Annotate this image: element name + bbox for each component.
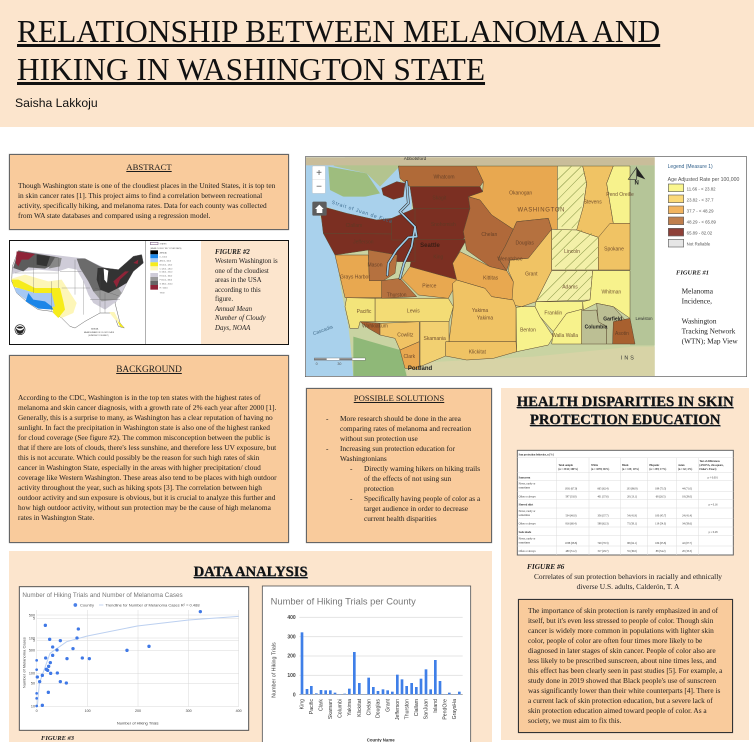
table: sun protection behaviours: 75 (58.1) <box>627 523 637 526</box>
map legend: 23.82 - < 37.7 <box>687 197 714 202</box>
x axis labels: 300 <box>186 709 192 713</box>
map base terrain <box>306 157 655 376</box>
figure 6 description: Correlates of sun protection behaviors in racially and ethnically <box>534 572 722 581</box>
figure 2 caption: Western Washington is <box>215 258 278 265</box>
county labels: Kittitas <box>483 276 499 282</box>
data points <box>35 610 202 707</box>
table: sun protection behaviours: 1038 (68.8) <box>565 542 577 545</box>
county labels: Lewis <box>407 309 420 315</box>
table: sun protection behaviours: p < 0.001 <box>708 476 718 479</box>
table: sun protection behaviours: (n = 135; 10%) <box>622 468 639 471</box>
map legend: 65.89 - 82.02 <box>687 231 713 236</box>
abstract text: activity, specifically hiking, and melanoma rates. Data for each county was collected <box>18 201 267 210</box>
county labels: SanJuan <box>424 699 430 719</box>
icon: north arrow: N <box>634 180 639 186</box>
y axis labels: 300 <box>287 634 296 640</box>
y axis labels: 400 <box>287 615 296 621</box>
county labels: Island <box>433 699 439 713</box>
table: sun protection behaviours: 88 (34.2) <box>656 550 666 553</box>
panel: possible solutions <box>306 388 492 543</box>
solution 1: More research should be done in the area <box>340 414 461 423</box>
x axis labels: 0 <box>36 709 38 713</box>
callout text <box>528 606 722 725</box>
y axis labels: 50 <box>31 682 35 686</box>
background text: According to the CDC, Washington is in the top ten states with the highest rates of <box>18 393 260 402</box>
figure 6 caption: FIGURE #6 <box>527 562 564 571</box>
county labels: Douglas <box>515 240 534 246</box>
county labels: Wenatchee <box>497 257 523 263</box>
table: sun protection behaviours: Often or always <box>519 495 536 498</box>
county labels: Yakima <box>472 308 488 314</box>
figure 2 caption: Number of Cloudy <box>215 315 266 322</box>
geographic labels <box>312 156 653 361</box>
county labels: Pend Oreille <box>606 192 634 198</box>
county labels: Klickitat <box>469 349 487 355</box>
map legend: Legend (Measure 1) <box>668 164 713 170</box>
table: sun protection behaviours <box>516 450 734 556</box>
figure 2 caption: according to this <box>215 287 261 294</box>
table: sun protection behaviours: Black <box>622 464 629 467</box>
county labels <box>340 174 634 360</box>
county labels: Clallam <box>414 699 420 716</box>
panel: background <box>9 355 289 543</box>
geographic labels: Cascadia <box>312 324 334 337</box>
callout text: skin protection education aimed toward people of color. As a <box>528 706 707 715</box>
health heading <box>516 394 734 428</box>
panel: data analysis <box>9 551 492 742</box>
map legend: C 120.0 - 140.0 <box>160 268 172 270</box>
figure 2 caption: figure. <box>215 296 233 303</box>
table: sun protection behaviours: 54 (41.9) <box>627 515 637 518</box>
scatter chart: Number of Hiking Trials and Number of Melanoma Cases <box>22 592 183 599</box>
white map area <box>10 241 201 344</box>
figure 1 caption: Incidence, <box>682 297 712 306</box>
map legend: F 160.0 - 180.0 <box>160 280 172 282</box>
figure 6 description <box>534 572 722 591</box>
callout text: was significantly lower than their white counterparts [4]. There is <box>528 686 720 695</box>
county labels: Grays Harbor <box>340 275 370 281</box>
county labels: Chelan <box>481 232 497 238</box>
x axis labels: Number of Melanoma Cases <box>21 637 26 688</box>
geographic labels: INS <box>621 355 636 361</box>
table: sun protection behaviours: 44 (71.0) <box>682 487 692 490</box>
x axis labels: 200 <box>135 709 141 713</box>
county labels: Jefferson <box>395 699 401 720</box>
county labels: GraysHa <box>452 699 458 719</box>
county labels: Grant <box>385 698 391 712</box>
table: sun protection behaviours: p = 0.16 <box>709 504 718 507</box>
x axis labels: Number of Hiking Trials <box>117 721 158 726</box>
abstract text: from WA state databases and compared using a regression model. <box>18 211 210 220</box>
bold place labels: Garfield <box>603 316 622 322</box>
figure 1 caption: Washington <box>682 317 717 326</box>
puget sound water <box>387 182 417 278</box>
table: sun protection behaviours: sometimes <box>519 541 530 544</box>
background text: cancer in Washington State, especially in the areas with higher precipitation/ cloud <box>18 463 261 472</box>
map caption: MEAN NUMBER OF CLOUDY DAYS <box>84 331 115 334</box>
county labels: Adams <box>562 285 578 291</box>
table: sun protection behaviours: (n = 259; 17%) <box>649 468 666 471</box>
county labels: Skamania <box>424 336 446 342</box>
county labels: Skamani <box>328 699 334 719</box>
county labels: Lincoln <box>564 249 580 255</box>
table: sun protection behaviours: 665 (62.4) <box>597 487 609 490</box>
background text <box>18 393 277 522</box>
background text: sunlight. In fact the precipitation in Washington state is also one of the highest ranked <box>18 423 270 432</box>
solution 2: Increasing sun protection education for <box>340 444 455 453</box>
county labels: Yakima <box>347 699 353 716</box>
county labels: Okanogan <box>509 191 532 197</box>
table: sun protection behaviours: 119 (54.3) <box>655 523 666 526</box>
header panel <box>0 0 754 127</box>
solution 1: - <box>326 414 328 423</box>
county labels: King <box>433 255 444 261</box>
y axis labels: 100 <box>29 636 35 640</box>
figure 3 caption: FIGURE #3 <box>41 735 74 742</box>
table: sun protection behaviours: 18 (29.0) <box>682 495 692 498</box>
table: sun protection behaviours: 356 (37.7) <box>597 515 609 518</box>
county labels <box>300 698 458 720</box>
solution 2b: Specifically having people of color as a <box>364 494 480 503</box>
solution 2 <box>326 444 455 463</box>
table: sun protection behaviours: 98 (64.1) <box>627 542 637 545</box>
trendline <box>37 616 239 707</box>
county labels: Pacific <box>309 699 315 714</box>
county labels: Chelan <box>366 699 372 715</box>
puget sound shoreline <box>387 182 417 278</box>
county labels: Columbi <box>338 699 344 718</box>
map legend: 11.66 - < 23.82 <box>687 186 716 191</box>
hatch marks: unreliable counties <box>537 166 598 301</box>
grid <box>37 610 239 707</box>
county labels: Jefferson <box>353 239 374 245</box>
solution 2b: - <box>350 494 352 503</box>
county labels: King <box>300 699 306 709</box>
callout: skin protection text <box>518 599 733 733</box>
y axis labels: 5 <box>33 617 35 621</box>
table: sun protection behaviours: 24 (41.4) <box>682 515 692 518</box>
figure 2 caption: Annual Mean <box>215 306 252 313</box>
figure 2 caption <box>214 249 278 332</box>
title <box>17 14 660 86</box>
icon: home button <box>312 202 327 216</box>
panel: health disparities <box>501 388 749 740</box>
county labels: Pierce <box>422 284 437 290</box>
county labels: Clark <box>403 354 416 360</box>
map legend: 37.7 - < 48.29 <box>687 208 714 213</box>
county labels: Stevens <box>584 200 602 206</box>
table: sun protection behaviours: 816 (60.4) <box>565 523 577 526</box>
panel: abstract <box>9 154 289 230</box>
callout text: study done in 2019 showed that Black people's use of sunscreen <box>528 676 716 685</box>
county labels: WASHINGTON <box>517 207 565 213</box>
icon: zoom controls: − <box>316 182 322 193</box>
table: sun protection behaviours: Test of differences <box>699 460 720 463</box>
x axis labels <box>21 637 242 726</box>
callout text: cancer is widely more common in populations with lighter skin <box>528 626 714 635</box>
icon: NOAA logo <box>15 325 25 335</box>
figure 2 caption: FIGURE #2 <box>215 249 250 256</box>
county labels: Whitman <box>601 290 621 296</box>
county labels: PendOre <box>442 699 448 720</box>
map legend: ANNUAL <box>160 251 167 254</box>
bar chart: Number of Hiking Trials per County <box>271 597 416 607</box>
abstract text <box>18 181 276 220</box>
callout text: The importance of skin protection is rarely emphasized in and of <box>528 606 718 615</box>
abstract heading: ABSTRACT <box>126 162 172 172</box>
map legend: TITLE <box>160 292 165 294</box>
solution 2a <box>350 464 480 493</box>
icon: zoom controls <box>312 166 325 193</box>
callout text: a current lack of skin protection education, but a severe lack of <box>528 696 713 705</box>
county labels: Douglas <box>376 699 382 718</box>
table: sun protection behaviours: 42 (67.7) <box>682 542 692 545</box>
scatter chart <box>18 586 250 731</box>
county labels: Wahkiakum <box>362 324 388 330</box>
solution 2b: current health disparities <box>364 514 437 523</box>
y axis labels: 0 <box>293 692 296 698</box>
table: sun protection behaviours: 401 (37.6) <box>597 495 609 498</box>
county labels: Pacific <box>357 309 372 315</box>
callout text: less likely to be prescribed sunscreen, about nine times less, and <box>528 656 716 665</box>
map legend: G 180.0 - 200.0 <box>160 284 172 286</box>
table: sun protection behaviours: Never, rarely or <box>519 510 536 513</box>
county labels: Clallam <box>346 223 362 229</box>
solution 1: comparing rates of melanoma and recreation <box>340 424 471 433</box>
map legend: B 100.0 - 120.0 <box>160 264 172 266</box>
solution 2a: of the effects of not using sun <box>364 474 451 483</box>
map legend: STATES <box>160 242 167 245</box>
county polygons <box>320 166 635 369</box>
x axis labels: 400 <box>236 709 242 713</box>
callout text: color, people of color are often four times more likely to be <box>528 636 702 645</box>
table: sun protection behaviours: Seek shade <box>519 531 532 534</box>
health heading: PROTECTION EDUCATION <box>530 412 720 428</box>
scale bar: 30 <box>337 362 341 366</box>
data analysis heading: DATA ANALYSIS <box>193 564 308 580</box>
abstract text: in skin cancer rates [1]. This project aims to find a correlation between recreational <box>18 191 262 200</box>
callout text: itself, but it's even less stressed to people of color. Though skin <box>528 616 713 625</box>
county labels: Yakima <box>477 315 493 321</box>
panel: figure 2 cloudy days map <box>9 240 289 345</box>
callout text: this effect has been clearly seen in past studies [5]. For example, a <box>528 666 722 675</box>
table: sun protection behaviours: 1831 (67.0) <box>565 487 577 490</box>
map legend: Age Adjusted Rate per 100,000 <box>668 177 739 183</box>
y axis labels: 10 <box>31 705 35 709</box>
solution 1: without sun protection use <box>340 434 418 443</box>
author: Saisha Lakkoju <box>15 96 98 110</box>
background heading: BACKGROUND <box>116 365 182 375</box>
table: sun protection behaviours: 597 (33.0) <box>565 495 577 498</box>
y axis labels <box>29 613 35 709</box>
table: sun protection behaviours: Often or always <box>519 523 536 526</box>
county labels: Thurston <box>404 699 410 719</box>
grid <box>299 617 463 675</box>
map caption <box>84 328 115 337</box>
solution 2b <box>350 494 480 523</box>
table: sun protection behaviours: Never, rarely or <box>519 537 536 540</box>
panel: Washington melanoma incidence map <box>305 156 747 377</box>
table: sun protection behaviours: Sun protection behavior, n (%) <box>519 453 554 456</box>
county labels: Cowlitz <box>397 333 414 339</box>
table: sun protection behaviours: Asian <box>678 464 685 467</box>
county labels: Grant <box>525 271 538 277</box>
table: sun protection behaviours: Total sample <box>558 464 574 467</box>
table: sun protection behaviours: p = 0.28 <box>709 531 718 534</box>
table: sun protection behaviours: Sleeved shirt <box>519 504 533 507</box>
title: HIKING IN WASHINGTON STATE <box>17 52 485 86</box>
solutions heading: POSSIBLE SOLUTIONS <box>354 393 444 403</box>
callout text: diagnosed in later stages of skin cancer. People of color also are <box>528 646 716 655</box>
table: sun protection behaviours: 34 (58.6) <box>682 523 692 526</box>
table: sun protection behaviours: 588 (62.3) <box>597 523 609 526</box>
icon: US cloudy days map <box>11 241 182 344</box>
map legend: Not Reliable <box>687 242 711 247</box>
bold place labels: Portland <box>408 366 432 372</box>
map legend <box>668 164 739 247</box>
table: sun protection behaviours: Hispanic <box>649 464 660 467</box>
solution 2a: Directly warning hikers on hiking trails <box>364 464 480 473</box>
background text: for cloud coverage (See figure #2). The common misconception between the public is <box>18 433 270 442</box>
map legend <box>150 242 182 294</box>
map legend: 0 - 100.0 <box>160 256 167 258</box>
background text: outdoor activity and sun exposure is obvious, but it is crucial to analyze this further and <box>18 493 275 502</box>
bar chart <box>262 586 472 742</box>
icon: zoom controls: + <box>316 168 322 179</box>
table: sun protection behaviours: (n = 3334; 100%) <box>558 468 578 471</box>
solution 1 <box>326 414 471 443</box>
map legend: (MEAN CLOUDY SKY COVER DAYS) <box>150 247 182 250</box>
geographic labels: Lewiston <box>635 316 653 321</box>
bold place labels <box>408 243 622 372</box>
table: sun protection behaviours: 100 (45.7) <box>655 515 666 518</box>
legend: Trendline for Number of Melanoma Cases R² = 0.488 <box>105 603 200 608</box>
county labels: Thurston <box>387 293 407 299</box>
solution 2a: protection <box>364 484 394 493</box>
table: sun protection behaviours: 55 (36.0) <box>627 550 637 553</box>
county labels: Asotin <box>615 331 629 337</box>
table: sun protection behaviours: 20 (13.1) <box>627 495 637 498</box>
map legend: E 150.0 - 160.0 <box>160 276 172 278</box>
table: sun protection behaviours: (ANOVA, chi-square, <box>699 464 724 467</box>
table: sun protection behaviours: Often or always <box>519 550 536 553</box>
background text: coverage like Western Washington. These areas also tend to be places with high outdoor <box>18 473 277 482</box>
table: sun protection behaviours: sometimes <box>519 514 530 517</box>
table: sun protection behaviours: sometimes <box>519 487 530 490</box>
health heading: HEALTH DISPARITIES IN SKIN <box>517 394 733 410</box>
table: sun protection behaviours: White <box>591 464 599 467</box>
solution 2: - <box>326 444 328 453</box>
map caption: ANNUAL <box>91 328 99 331</box>
solution 2a: - <box>350 464 352 473</box>
map legend: 48.29 - < 65.89 <box>687 219 716 224</box>
map legend: A 80.0 - 100.0 <box>160 259 171 262</box>
y axis title: Number of Hiking Trials <box>272 642 278 698</box>
bold place labels: Columbia <box>585 325 608 331</box>
y axis labels: 500 <box>29 649 35 653</box>
table: sun protection behaviours: 68 (26.5) <box>656 495 666 498</box>
x axis labels: 100 <box>85 709 91 713</box>
scale bar <box>314 358 365 366</box>
table: sun protection behaviours: 189 (73.5) <box>655 487 666 490</box>
table: sun protection behaviours: (n = 62; 4%) <box>678 468 692 471</box>
background text: that if there are lots of clouds, there's less sunshine, and therefore less UV exposure, but <box>18 443 276 452</box>
background text: rates in Washington State. <box>18 513 94 522</box>
county labels: Walla Walla <box>552 333 578 339</box>
figure 2 caption: one of the cloudiest <box>215 268 269 275</box>
map caption: (SUNRISE TO SUNSET) <box>88 335 109 337</box>
background text: Generally, this is a surprise to many, as Washington has a clear reputation of having no <box>18 413 273 422</box>
table: sun protection behaviours: Fisher's Exact) <box>699 468 716 471</box>
county labels: Skagit <box>432 195 447 201</box>
figure 2 caption: Days, NOAA <box>215 325 250 332</box>
y axis labels: 100 <box>29 672 35 676</box>
table: sun protection behaviours: 169 (65.8) <box>655 542 666 545</box>
geographic labels: Strait of Juan de Fuca <box>331 200 393 225</box>
table: sun protection behaviours: 133 (86.9) <box>626 487 638 490</box>
figure 2 caption: areas in the USA <box>215 277 262 284</box>
table: sun protection behaviours: Never, rarely or <box>519 483 536 486</box>
county labels: Spokane <box>604 247 624 253</box>
table: sun protection behaviours: 480 (31.2) <box>565 550 577 553</box>
y axis labels <box>287 615 296 698</box>
geographic labels: Abbotsford <box>404 156 427 161</box>
figure 1 caption: Tracking Network <box>682 327 736 336</box>
map legend: D 130.0 - 150.0 <box>160 272 172 274</box>
county labels: Whatcom <box>433 174 455 180</box>
county labels: Mason <box>367 262 383 268</box>
scale bar: 0 <box>316 362 318 366</box>
y axis labels: 100 <box>287 673 296 679</box>
county labels: Benton <box>520 327 536 333</box>
table: sun protection behaviours: 534 (40.0) <box>565 515 577 518</box>
y axis labels: 500 <box>29 613 35 617</box>
background text: this is not accurate. Which could possibly be the reason for such high rates of skin <box>18 453 259 462</box>
solution 2b: target audience in order to decrease <box>364 504 468 513</box>
bold place labels: Seattle <box>420 243 440 249</box>
abstract text: Though Washington state is one of the cloudiest places in the United States, it is top ten <box>18 181 275 190</box>
figure 1 caption <box>676 269 738 346</box>
table: sun protection behaviours: (n = 1878; 69%) <box>591 468 609 471</box>
county labels: Franklin <box>544 310 562 316</box>
bars <box>301 632 461 694</box>
figure 1 caption: Melanoma <box>682 287 714 296</box>
callout text: society, we must aim to fix this. <box>528 716 621 725</box>
icon: north arrow <box>628 167 645 186</box>
table: sun protection behaviours: 20 (33.3) <box>682 550 692 553</box>
background text: activity throughout the year, such as hiking spots [3]. The correlation between high <box>18 483 262 492</box>
county labels: Klickitat <box>357 698 363 717</box>
title: RELATIONSHIP BETWEEN MELANOMA AND <box>17 14 660 49</box>
table: sun protection behaviours: 317 (29.7) <box>597 550 609 553</box>
figure 1 caption: FIGURE #1 <box>676 269 709 276</box>
table: sun protection behaviours: Sunscreen <box>519 476 531 479</box>
y axis labels: 5 <box>33 639 35 643</box>
solutions list <box>326 414 480 523</box>
figure 1 caption: (WTN); Map View <box>682 337 738 346</box>
table: sun protection behaviours: 749 (70.3) <box>597 542 609 545</box>
background text: how high outdoor activity, without sun protection may be the cause of high melanoma <box>18 503 271 512</box>
solution 2: Washingtonians <box>340 454 387 463</box>
legend: Country <box>80 603 94 608</box>
y axis labels: 200 <box>287 654 296 660</box>
background text: melanoma and skin cancer diagnosis, with a growth rate of 2% each year after 2000 [1]. <box>18 403 276 412</box>
county labels: Snohomish <box>431 222 456 228</box>
map legend: H > 200.0 <box>160 287 168 290</box>
county labels: Clark <box>319 699 325 711</box>
figure 6 description: diverse U.S. adults, Calderón, T. A <box>577 582 679 591</box>
